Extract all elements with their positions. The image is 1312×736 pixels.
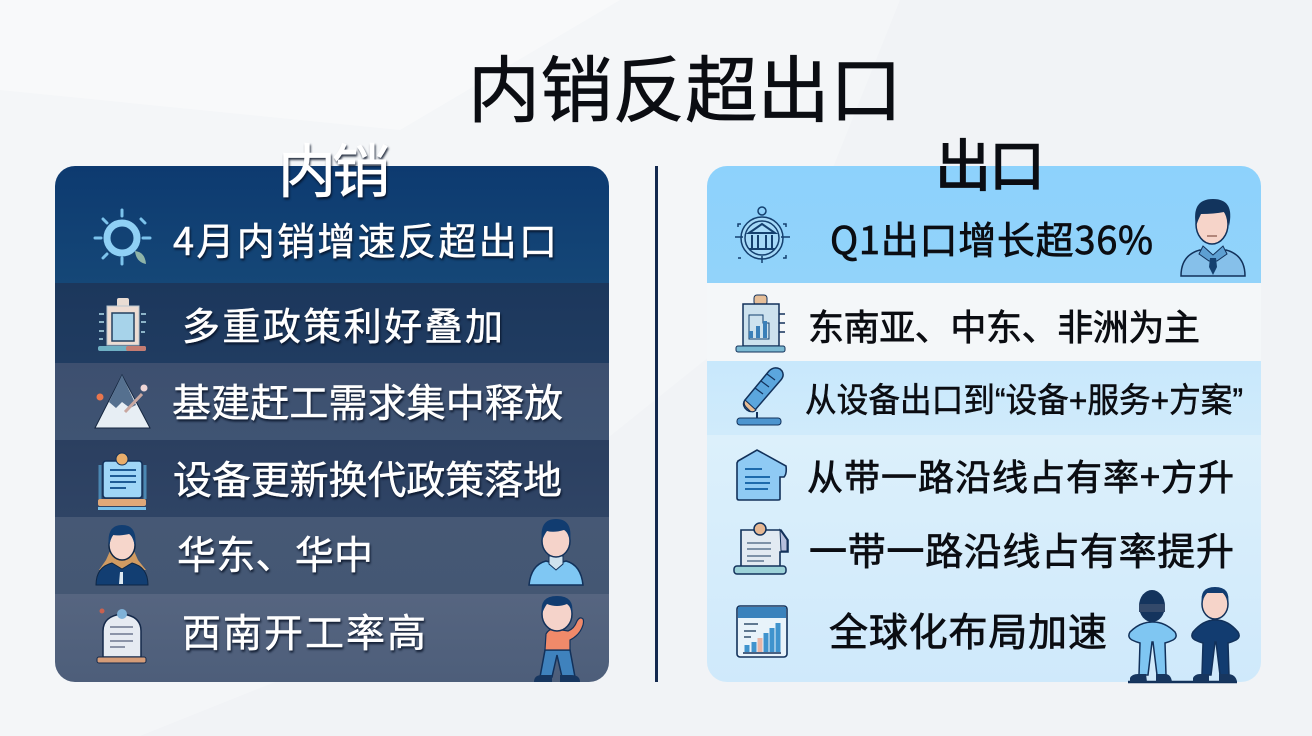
text: 多重政策利好叠加: 多重政策利好叠加 — [182, 296, 503, 351]
heading: 出口: 出口 — [935, 122, 1045, 203]
icon: mountain — [95, 375, 150, 428]
panel: 内销 — [55, 166, 609, 682]
text: 全球化布局加速: 全球化布局加速 — [829, 602, 1107, 658]
text: 基建赶工需求集中释放: 基建赶工需求集中释放 — [172, 373, 563, 429]
icon: document stand — [98, 453, 146, 510]
icon: chart window — [737, 606, 787, 657]
text: 西南开工率高: 西南开工率高 — [182, 603, 426, 659]
text: 东南亚、中东、非洲为主: 东南亚、中东、非洲为主 — [808, 299, 1200, 351]
panel background: 出口 rows — [707, 166, 1261, 682]
text: 4月内销增速反超出口: 4月内销增速反超出口 — [173, 211, 557, 266]
text: 从带一路沿线占有率+方升: 从带一路沿线占有率+方升 — [807, 449, 1234, 501]
icon: clipboard — [98, 298, 146, 351]
text: 华东、华中: 华东、华中 — [177, 525, 373, 581]
text: 一带一路沿线占有率提升: 一带一路沿线占有率提升 — [809, 521, 1234, 576]
icon: man in blue shirt — [529, 519, 583, 585]
text: Q1出口增长超36%: Q1出口增长超36% — [830, 210, 1153, 265]
icon: tablet tag — [97, 608, 146, 663]
panel: 出口 — [707, 166, 1261, 682]
panel background: 内销 rows — [55, 166, 609, 682]
icon: woman — [96, 525, 148, 585]
icon: bank globe — [735, 207, 790, 263]
icon: microscope — [737, 368, 783, 425]
icon: businessman — [1181, 199, 1245, 276]
icon: scroll stand — [734, 523, 788, 574]
text: 从设备出口到“设备+服务+方案”: 从设备出口到“设备+服务+方案” — [805, 382, 1243, 420]
title: 内销反超出口 — [468, 32, 902, 137]
icon: sun magnifier — [95, 210, 150, 264]
icon: document house — [737, 450, 786, 500]
icon: waving man — [534, 596, 584, 682]
divider — [655, 166, 658, 682]
text: 设备更新换代政策落地: 设备更新换代政策落地 — [173, 450, 562, 506]
icon: two people — [1128, 587, 1239, 682]
heading: 内销: 内销 — [278, 125, 390, 209]
icon: building chart — [736, 295, 785, 352]
